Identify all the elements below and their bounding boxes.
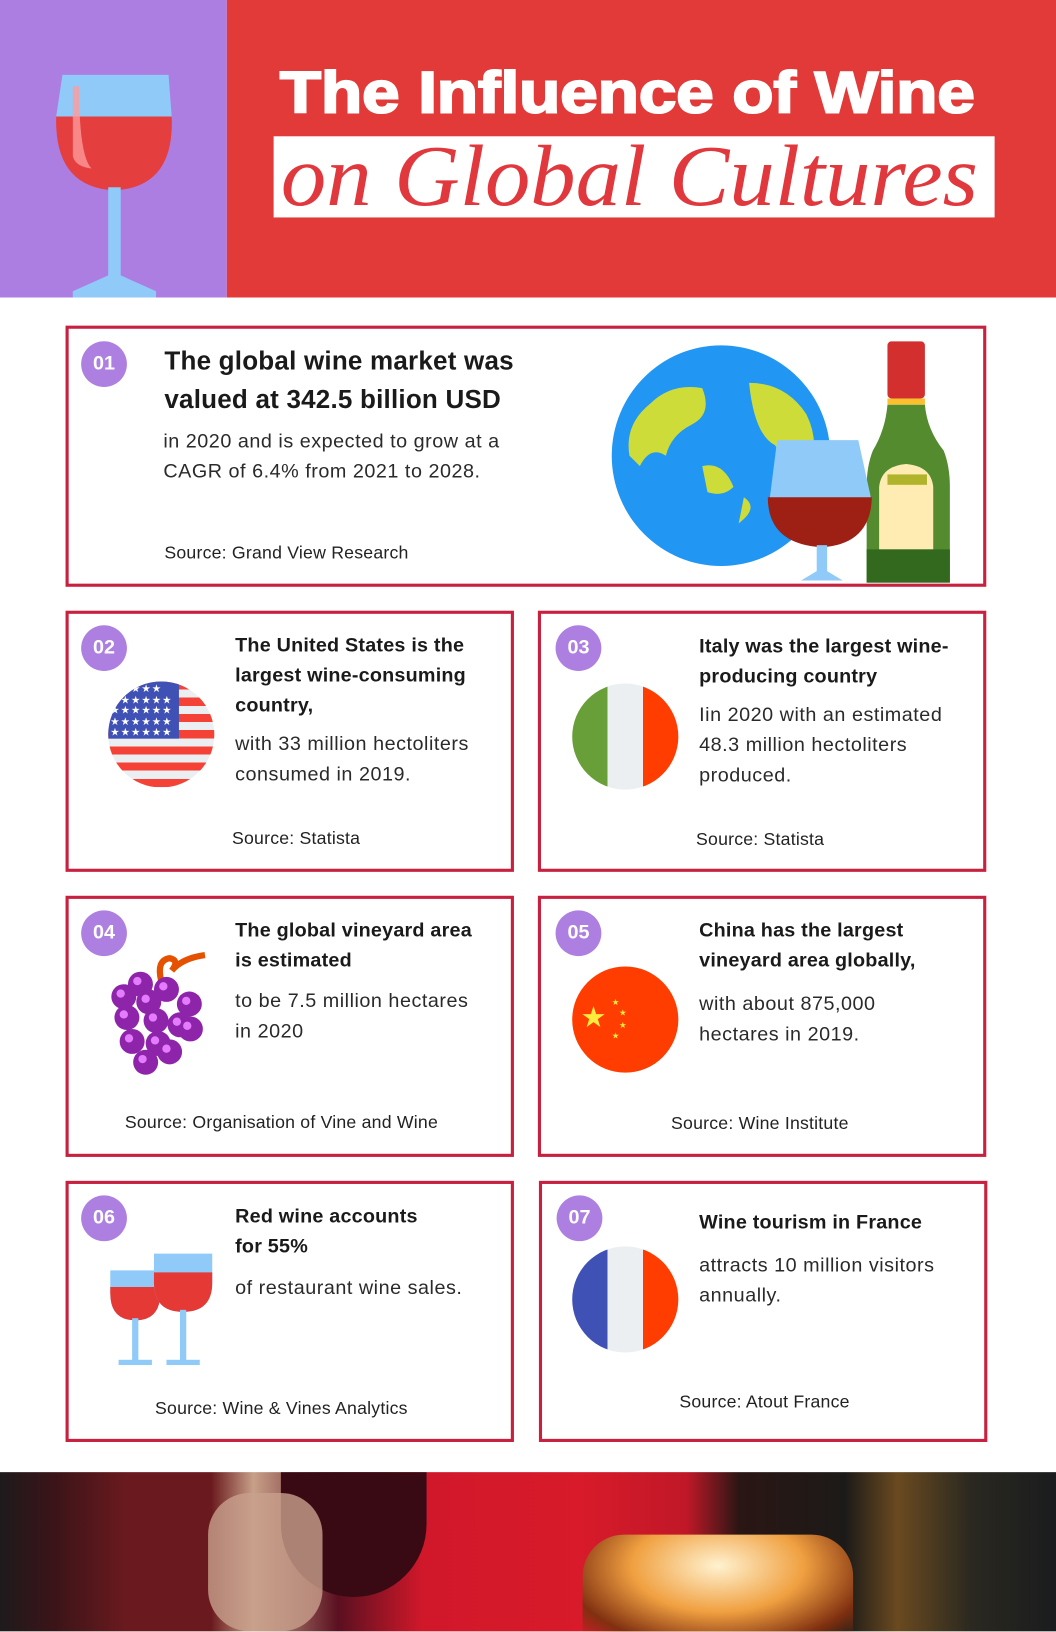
icon: US flag xyxy=(108,681,214,788)
badge 06 xyxy=(81,1195,127,1241)
text 04 xyxy=(235,990,468,1042)
header xyxy=(0,0,1056,298)
text 05: hectares in 2019. xyxy=(699,1024,860,1046)
source 04: Source: Organisation of Vine and Wine xyxy=(125,1112,438,1132)
text 05 xyxy=(699,994,876,1046)
icon: China flag: ★ xyxy=(619,1021,626,1030)
badge 02: 02 xyxy=(93,637,115,659)
icon: grapes xyxy=(111,952,206,1075)
badge 04: 04 xyxy=(93,922,115,944)
source 03: Source: Statista xyxy=(696,829,824,849)
panel 02 xyxy=(66,611,514,872)
heading 03: producing country xyxy=(699,666,877,688)
source 06: Source: Wine & Vines Analytics xyxy=(155,1398,408,1418)
panel 04 xyxy=(66,896,514,1157)
heading 03 xyxy=(699,636,949,688)
source 05: Source: Wine Institute xyxy=(671,1113,849,1133)
text 07: attracts 10 million visitors xyxy=(699,1255,935,1277)
text 04: in 2020 xyxy=(235,1021,304,1042)
badge 03 xyxy=(556,625,601,671)
heading 02: The United States is the xyxy=(235,635,464,656)
heading 01: The global wine market was xyxy=(164,346,514,376)
text 01: CAGR of 6.4% from 2021 to 2028. xyxy=(163,461,481,483)
badge 01 xyxy=(81,341,127,387)
text 07: annually. xyxy=(699,1285,781,1307)
heading 06: for 55% xyxy=(235,1236,308,1258)
text 01: in 2020 and is expected to grow at a xyxy=(163,431,500,453)
icon: wine glass xyxy=(56,75,172,298)
heading 06 xyxy=(235,1206,418,1258)
heading 04: The global vineyard area xyxy=(235,920,472,942)
heading 02: largest wine-consuming xyxy=(235,665,466,687)
heading 03: Italy was the largest wine- xyxy=(699,636,949,658)
title: The Influence of Wine xyxy=(280,60,975,125)
text 03: produced. xyxy=(699,765,792,787)
badge 03: 03 xyxy=(567,637,589,659)
heading 04 xyxy=(235,920,472,972)
icon: two glasses xyxy=(110,1254,212,1365)
icon: China flag: ★ xyxy=(612,1031,619,1040)
text 02: consumed in 2019. xyxy=(235,764,411,785)
badge 07 xyxy=(557,1195,602,1241)
heading 02: country, xyxy=(235,695,313,717)
text 02 xyxy=(235,733,469,785)
icon: China flag xyxy=(572,967,678,1073)
title xyxy=(274,60,995,224)
panel 03 xyxy=(538,611,986,872)
heading 07: Wine tourism in France xyxy=(699,1212,922,1234)
panel 05 xyxy=(538,896,986,1157)
heading 02 xyxy=(235,635,466,717)
text 03: 48.3 million hectoliters xyxy=(699,735,907,756)
icon: China flag: ★ xyxy=(619,1008,626,1018)
title: on Global Cultures xyxy=(281,127,978,224)
source 01: Source: Grand View Research xyxy=(164,543,409,563)
text 07 xyxy=(699,1255,935,1307)
source 07: Source: Atout France xyxy=(679,1392,850,1412)
heading 04: is estimated xyxy=(235,950,352,972)
icon: China flag: ★ xyxy=(581,1001,607,1033)
heading 05: China has the largest xyxy=(699,920,903,942)
badge 02 xyxy=(81,625,127,671)
badge 06: 06 xyxy=(93,1207,115,1229)
text 03: Iin 2020 with an estimated xyxy=(699,704,942,726)
panel 06 xyxy=(66,1181,514,1442)
icon: France flag xyxy=(572,1246,678,1353)
text 03 xyxy=(699,704,942,787)
panel 07 xyxy=(539,1181,987,1442)
badge 05 xyxy=(556,910,601,956)
text 06: of restaurant wine sales. xyxy=(235,1278,462,1299)
photo: wine scene xyxy=(0,1472,1056,1631)
panel 01 xyxy=(66,326,986,587)
heading 06: Red wine accounts xyxy=(235,1206,418,1228)
icon: Italy flag xyxy=(572,684,678,790)
source 02: Source: Statista xyxy=(232,828,360,848)
heading 01 xyxy=(164,346,514,414)
heading 05: vineyard area globally, xyxy=(699,950,916,972)
heading 05 xyxy=(699,920,916,972)
text 01 xyxy=(163,431,500,483)
icon: globe bottle glass xyxy=(612,341,950,583)
badge 04 xyxy=(81,910,127,956)
text 02: with 33 million hectoliters xyxy=(235,733,469,755)
text 05: with about 875,000 xyxy=(699,994,876,1015)
icon: China flag: ★ xyxy=(612,998,619,1007)
text 04: to be 7.5 million hectares xyxy=(235,990,468,1012)
icon: US flag: ★★★★★ ★★★★★★ ★★★★★★ ★★★★★★ ★★★★★★ xyxy=(110,684,172,739)
badge 07: 07 xyxy=(568,1207,590,1229)
heading 01: valued at 342.5 billion USD xyxy=(164,385,501,414)
badge 05: 05 xyxy=(567,922,589,944)
badge 01: 01 xyxy=(93,353,115,375)
